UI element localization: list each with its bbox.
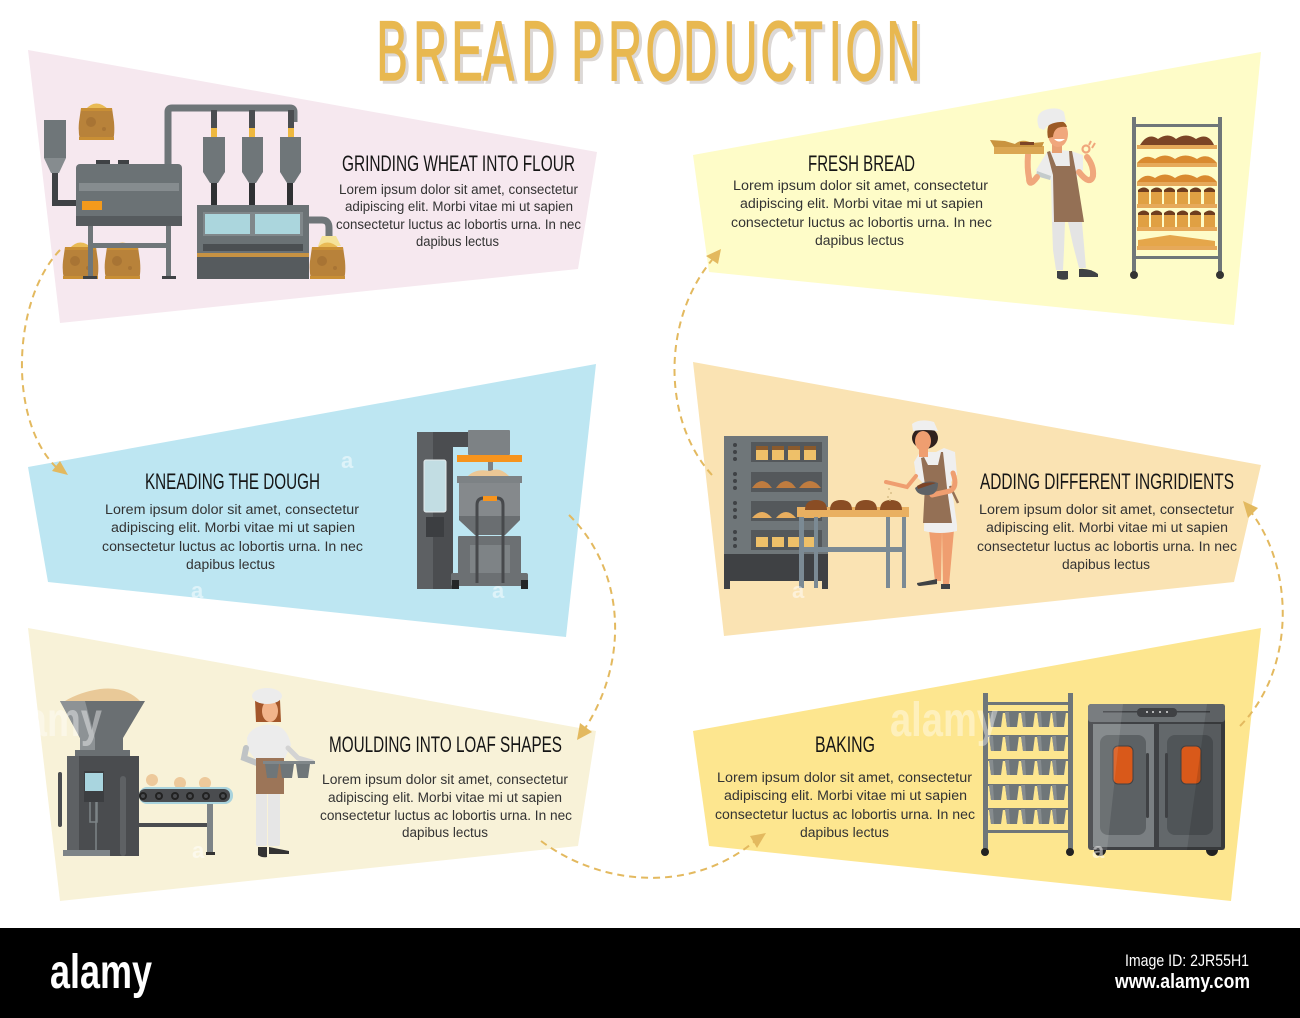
text block: baking: Lorem ipsum dolor sit amet, consectetur [717, 770, 973, 785]
arrow: grinding to kneading [22, 250, 68, 475]
text block: adding ingredients: dapibus lectus [1062, 557, 1150, 572]
icon: dough mixer [417, 430, 528, 589]
heading: kneading: KNEADING THE DOUGH [145, 469, 320, 494]
text block: baking: consectetur luctus ac lobortis urna. In nec [715, 807, 975, 822]
heading: baking: BAKING [815, 732, 875, 757]
icon: double door oven [1088, 704, 1225, 856]
panel background: cream [28, 628, 596, 901]
text block: fresh bread: dapibus lectus [815, 233, 904, 248]
arrow: adding ingredients to fresh bread [674, 249, 721, 475]
panel background: pale yellow [693, 52, 1261, 325]
text block: kneading: Lorem ipsum dolor sit amet, consectetur [105, 502, 360, 517]
text block: grinding: dapibus lectus [416, 234, 499, 249]
panel: grinding wheat into flour [28, 50, 597, 323]
text block: baking [715, 770, 975, 840]
text block: fresh bread: adipiscing elit. Morbi vitae mi ut sapien [740, 196, 983, 211]
icon: oven with loaves [724, 436, 828, 589]
watermarks: alamy: alamy [890, 694, 998, 747]
text block: moulding [320, 772, 572, 840]
panel: fresh bread [693, 52, 1261, 325]
footer logo: alamy [50, 946, 152, 999]
panel background: pink [28, 50, 597, 323]
website: www.alamy.com [1114, 971, 1250, 993]
text block: grinding: consectetur luctus ac lobortis urna. In nec [336, 217, 581, 232]
watermarks: alamy [0, 448, 1105, 863]
watermarks: alamy: a [341, 448, 354, 473]
panel: adding different ingredients [693, 362, 1261, 636]
icon: dough divider and conveyor [58, 688, 233, 856]
arrow: baking to adding ingredients [1240, 501, 1283, 726]
heading: fresh bread: FRESH BREAD [808, 151, 915, 176]
text block: adding ingredients: consectetur luctus ac lobortis urna. In nec [977, 539, 1237, 554]
text block: kneading: consectetur luctus ac lobortis urna. In nec [102, 539, 363, 554]
text block: adding ingredients: Lorem ipsum dolor sit amet, consectetur [979, 502, 1235, 517]
footer bar [0, 928, 1300, 1018]
panel background: yellow [693, 628, 1261, 901]
icon: baker with tray of bread [990, 108, 1098, 280]
arrow: kneading to moulding [569, 515, 615, 740]
icon: rack of loaf pans [981, 693, 1074, 856]
panel: baking [693, 628, 1261, 901]
icon: bread rack [1130, 117, 1224, 279]
image id: Image ID: 2JR55H1 [1125, 952, 1249, 970]
text block: adding ingredients: adipiscing elit. Morbi vitae mi ut sapien [986, 520, 1228, 535]
watermarks: alamy: a [492, 578, 505, 603]
icon: flour mill machinery [44, 104, 345, 279]
text block: fresh bread: Lorem ipsum dolor sit amet, consectetur [733, 178, 989, 193]
panel: kneading the dough [28, 364, 596, 637]
text block: baking: adipiscing elit. Morbi vitae mi ut sapien [724, 788, 967, 803]
icon: table with loaves [797, 500, 909, 588]
watermarks: alamy: a [192, 838, 205, 863]
text block: moulding: consectetur luctus ac lobortis urna. In nec [320, 808, 572, 823]
text block: moulding: adipiscing elit. Morbi vitae mi ut sapien [328, 790, 562, 805]
title: BREAD PRODUCTION [376, 5, 920, 99]
icon: baker adding ingredients [886, 420, 958, 589]
text block: grinding: adipiscing elit. Morbi vitae mi ut sapien [345, 199, 573, 214]
arrow: moulding to baking [541, 833, 766, 878]
text block: adding ingredients [977, 502, 1237, 572]
panel background: orange [693, 362, 1261, 636]
panel: moulding into loaf shapes [28, 628, 596, 901]
text block: moulding: dapibus lectus [402, 825, 488, 840]
title: BREAD PRODUCTION [379, 8, 923, 102]
text block: fresh bread: consectetur luctus ac lobortis urna. In nec [731, 215, 992, 230]
watermarks: alamy: a [792, 578, 805, 603]
watermarks: alamy: a [1092, 838, 1105, 863]
heading: moulding: MOULDING INTO LOAF SHAPES [329, 732, 562, 757]
icon: baker with loaf pans [244, 688, 315, 857]
text block: baking: dapibus lectus [800, 825, 889, 840]
text block: moulding: Lorem ipsum dolor sit amet, consectetur [322, 772, 569, 787]
text block: kneading [102, 502, 363, 572]
text block: kneading: dapibus lectus [186, 557, 275, 572]
text block: fresh bread [731, 178, 992, 248]
panel background: blue [28, 364, 596, 637]
heading: grinding: GRINDING WHEAT INTO FLOUR [342, 151, 575, 176]
text block: grinding [336, 182, 581, 249]
watermarks: alamy: a [191, 578, 204, 603]
text block: grinding: Lorem ipsum dolor sit amet, consectetur [339, 182, 578, 197]
text block: kneading: adipiscing elit. Morbi vitae mi ut sapien [111, 520, 355, 535]
